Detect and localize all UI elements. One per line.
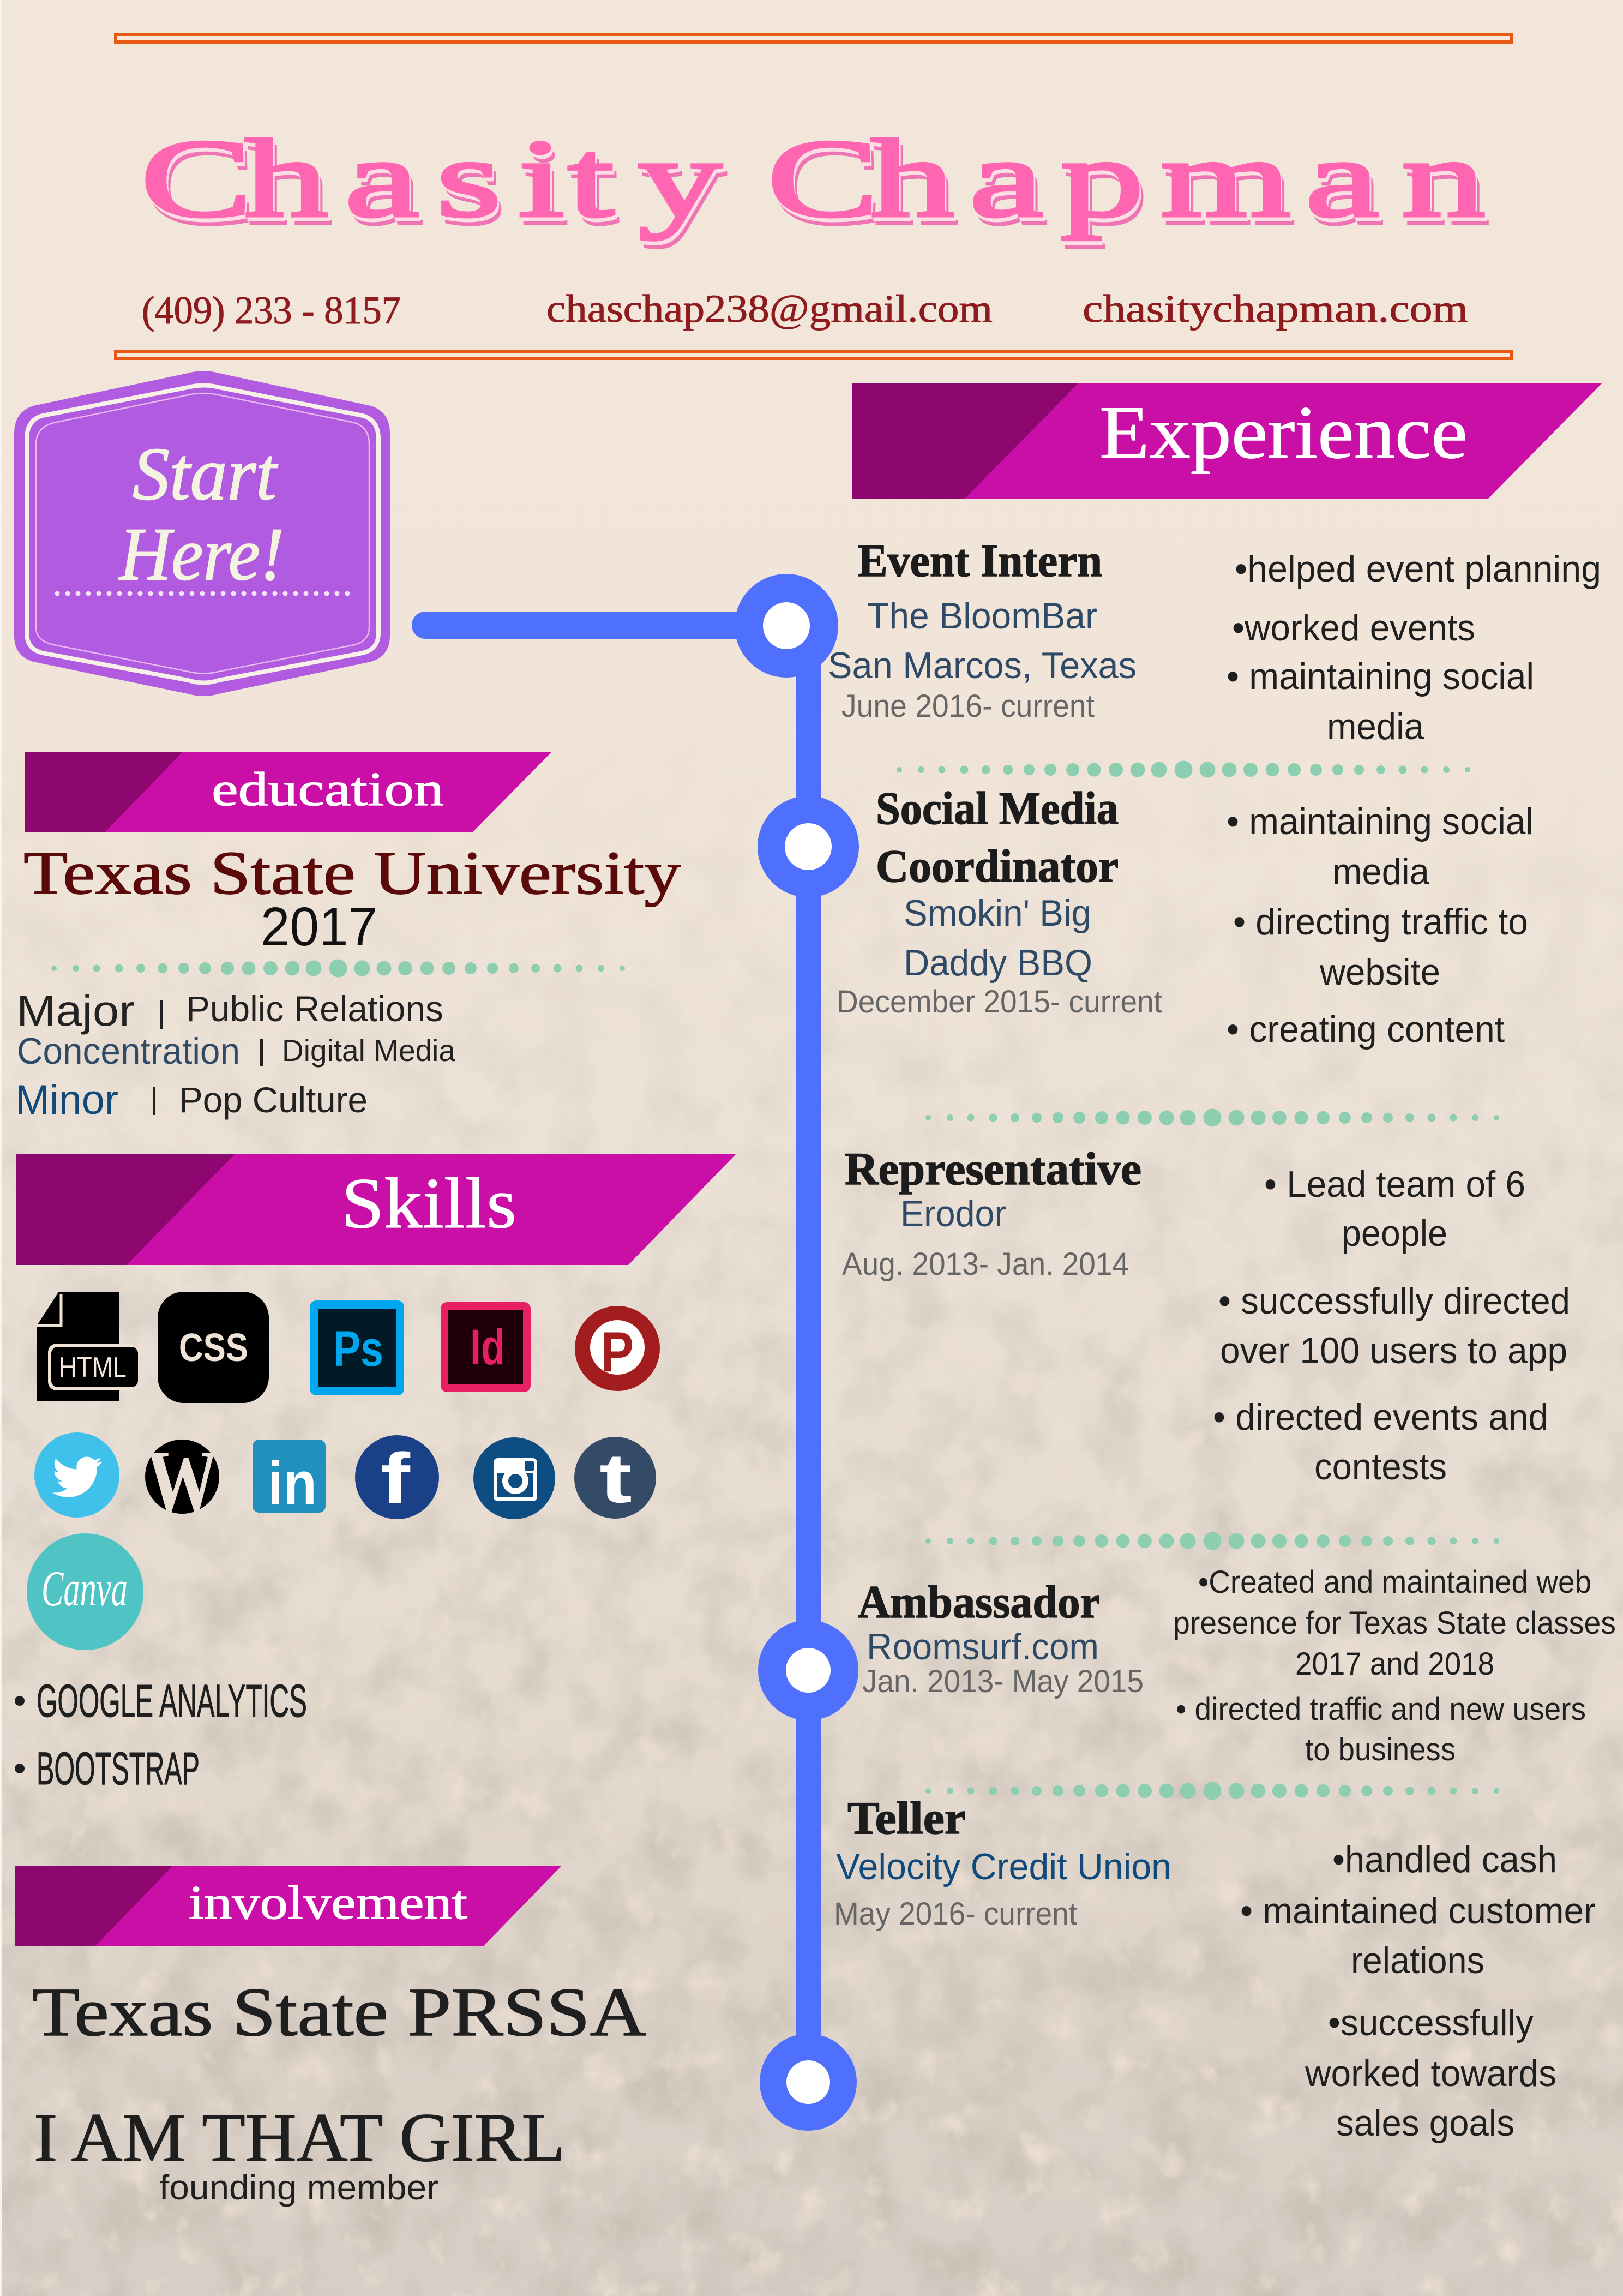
badge text: Start: Start: [133, 432, 279, 515]
dates: December 2015- current: [837, 984, 1162, 1020]
job title: Event Intern: [858, 535, 1102, 586]
duties: [1240, 1839, 1596, 2144]
minor: Pop Culture: [179, 1080, 368, 1120]
minor: [15, 1077, 368, 1123]
dates: May 2016- current: [834, 1896, 1077, 1932]
icon: indesign: Id: [470, 1320, 505, 1375]
phone: (409) 233 - 8157: [142, 289, 401, 332]
start here badge: [14, 371, 390, 696]
duties: [1213, 1164, 1570, 1488]
concentration: Concentration: [17, 1030, 240, 1072]
icon: photoshop: Ps: [333, 1321, 383, 1377]
duties: • maintained customer: [1240, 1890, 1596, 1932]
timeline node 1: [735, 574, 838, 678]
duties: media: [1332, 851, 1429, 892]
website: chasitychapman.com: [1083, 287, 1468, 331]
icon: pinterest: P: [601, 1321, 634, 1384]
duties: •Created and maintained web: [1198, 1564, 1591, 1600]
duties: •successfully: [1328, 2002, 1534, 2043]
title: name: Chasity Chapman: [145, 124, 1489, 248]
duties: • directed events and: [1213, 1396, 1548, 1438]
job 3: representative: [842, 1143, 1570, 1488]
job title: Social Media: [876, 783, 1119, 834]
duties: worked towards: [1305, 2053, 1556, 2094]
location: San Marcos, Texas: [828, 645, 1137, 686]
second orange rule: [116, 351, 1512, 358]
icon: canva: [27, 1533, 143, 1650]
icon: twitter: [34, 1432, 119, 1518]
involvement label: involvement: [189, 1877, 467, 1929]
involvement: PRSSA: Texas State PRSSA: [32, 1974, 646, 2051]
employer: Roomsurf.com: [867, 1626, 1099, 1668]
duties: sales goals: [1336, 2102, 1514, 2144]
google analytics: [15, 1675, 307, 1727]
employer: Velocity Credit Union: [836, 1846, 1171, 1887]
job title: [876, 783, 1119, 892]
duties: •helped event planning: [1235, 548, 1601, 590]
concentration: Digital Media: [282, 1033, 456, 1068]
employer: Smokin' Big: [904, 892, 1091, 934]
icon: wordpress: W: [146, 1431, 218, 1531]
icon: html: HTML: [59, 1352, 127, 1383]
icon: css: [158, 1292, 269, 1403]
icon: facebook: [355, 1435, 439, 1519]
minor: Minor: [15, 1077, 118, 1123]
dotted divider: [897, 760, 1470, 779]
duties: • maintaining social: [1227, 801, 1534, 842]
icon: tumblr: [574, 1437, 656, 1519]
job title: Ambassador: [858, 1576, 1100, 1628]
icon: canva: Canva: [41, 1561, 128, 1616]
badge text: Here: Here!: [118, 512, 284, 596]
duties: • Lead team of 6: [1264, 1164, 1525, 1205]
skills label: Skills: [341, 1163, 516, 1243]
duties: • creating content: [1227, 1009, 1505, 1050]
banner: education: [25, 752, 552, 832]
bootstrap: BOOTSTRAP: [37, 1743, 200, 1794]
contact line: [142, 287, 1468, 332]
icon: indesign: [441, 1302, 531, 1392]
icon: photoshop: [310, 1300, 404, 1395]
involvement: founding member: founding member: [159, 2168, 438, 2207]
duties: people: [1342, 1213, 1447, 1254]
icon: linkedin: in: [268, 1449, 317, 1518]
skill list: [15, 1675, 307, 1794]
timeline node 4: [760, 2034, 857, 2131]
education label: education: [212, 763, 444, 816]
dates: June 2016- current: [841, 688, 1095, 724]
education details: [15, 839, 681, 1123]
timeline: connector and spine: [412, 612, 821, 2084]
icon: facebook: f: [381, 1438, 411, 1519]
major: [16, 986, 443, 1035]
duties: • successfully directed: [1218, 1280, 1570, 1322]
icon: wordpress: [145, 1440, 219, 1514]
job 2: social media coordinator: [837, 783, 1534, 1050]
dates: Aug. 2013- Jan. 2014: [842, 1246, 1129, 1282]
dotted divider: [925, 1532, 1499, 1550]
duties: website: [1319, 951, 1440, 993]
duties: contests: [1314, 1446, 1447, 1488]
google analytics: GOOGLE ANALYTICS: [37, 1675, 307, 1727]
job title: Representative: [845, 1143, 1141, 1195]
icon: html: [37, 1292, 138, 1401]
icon: linkedin: [253, 1440, 326, 1518]
job 4: ambassador: [858, 1564, 1616, 1767]
icon: pinterest: [575, 1306, 660, 1391]
top orange rule: [116, 34, 1512, 42]
employer: The BloomBar: [867, 595, 1097, 637]
duties: [1227, 801, 1534, 1050]
timeline node 2: [758, 796, 859, 897]
university: Texas State University: [23, 839, 681, 907]
duties: over 100 users to app: [1220, 1330, 1567, 1371]
duties: to business: [1305, 1732, 1456, 1767]
title: name: Chasity Chapman: [141, 116, 1486, 241]
duties: media: [1327, 706, 1424, 747]
job 5: teller: [834, 1793, 1596, 2144]
employer: Daddy BBQ: [904, 942, 1092, 984]
major: Public Relations: [186, 988, 443, 1029]
dotted divider: [51, 959, 625, 978]
year: 2017: [261, 896, 377, 957]
duties: [1173, 1564, 1616, 1767]
duties: • directing traffic to: [1233, 901, 1528, 943]
duties: • directed traffic and new users: [1176, 1692, 1586, 1727]
duties: [1227, 548, 1601, 747]
employer: [904, 892, 1092, 984]
duties: presence for Texas State classes: [1173, 1605, 1616, 1641]
banner: skills: [16, 1154, 736, 1265]
title: name: Chasity Chapman: [142, 120, 1487, 244]
banner: experience: [852, 383, 1602, 499]
concentration: [17, 1030, 456, 1072]
icon: tumblr: t: [599, 1440, 632, 1518]
major: Major: [16, 986, 135, 1035]
dotted divider: [925, 1108, 1499, 1127]
job 1: event intern: [828, 535, 1601, 747]
icon: instagram: [473, 1437, 555, 1519]
employer: Erodor: [900, 1193, 1006, 1234]
job title: Teller: [847, 1793, 966, 1844]
duties: •handled cash: [1332, 1839, 1557, 1880]
timeline node 3: [758, 1620, 858, 1720]
experience label: Experience: [1099, 391, 1468, 474]
dotted divider: [925, 1782, 1499, 1800]
icon: css: CSS: [179, 1326, 248, 1370]
duties: • maintaining social: [1227, 656, 1534, 697]
banner: involvement: [15, 1866, 562, 1946]
duties: •worked events: [1232, 607, 1475, 649]
involvement: I Am That Girl: I AM THAT GIRL: [34, 2100, 565, 2176]
dates: Jan. 2013- May 2015: [862, 1664, 1144, 1699]
bootstrap: [15, 1743, 200, 1794]
duties: relations: [1351, 1940, 1484, 1981]
duties: 2017 and 2018: [1295, 1646, 1494, 1682]
job title: Coordinator: [876, 841, 1119, 892]
email: chaschap238@gmail.com: [546, 287, 993, 331]
